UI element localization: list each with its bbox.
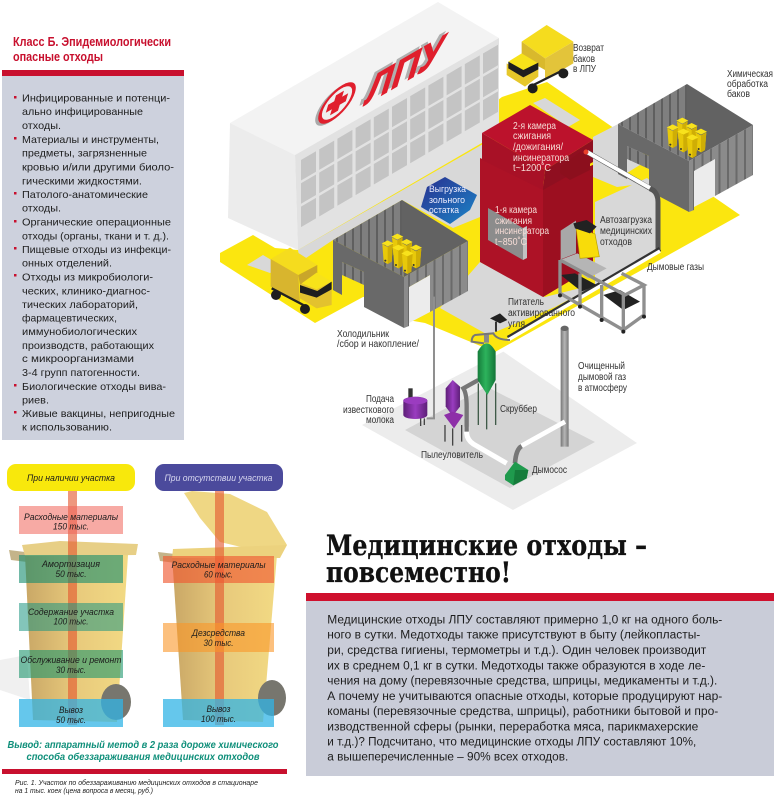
article (306, 529, 774, 776)
waste list text: производств, работающих (22, 340, 155, 352)
diagram labels: в ЛПУ (573, 64, 597, 75)
left option header (7, 464, 135, 491)
diagram labels: дымовой газ (578, 372, 626, 383)
ash discharge hexagon: Выгрузка (429, 184, 467, 195)
waste list text: ально инфицированные (22, 106, 143, 118)
flue gas pipe (584, 150, 658, 250)
duct from dust collector (467, 427, 507, 463)
waste list text: онных отделений. (22, 258, 112, 270)
diagram labels: Подача (366, 394, 394, 405)
hospital building (228, 2, 499, 250)
left cost blocks: Расходные материалы (24, 512, 118, 523)
chamber labels: сжигания (513, 131, 551, 142)
left cost blocks: Амортизация (41, 559, 100, 570)
ground: yellow roads (220, 82, 740, 352)
article text: изводственной сферы (рынки, переработка мяса, парикмахерские (327, 721, 698, 733)
bins cost comparison (0, 464, 287, 795)
left cost blocks: 150 тыс. (53, 522, 89, 532)
diagram labels: угля (508, 319, 525, 330)
diagram labels: баков (573, 53, 595, 65)
ash discharge hexagon: зольного (429, 195, 465, 206)
right cost blocks: 100 тыс. (201, 714, 236, 725)
exhaust fan (505, 462, 528, 485)
left cost blocks: 50 тыс. (56, 569, 86, 580)
hospital logo: ЛПУ (360, 23, 451, 115)
diagram labels: Дымовые газы (647, 262, 704, 273)
equipment pad (362, 352, 637, 510)
left bin illustration (0, 541, 138, 722)
right cost blocks: Расходные материалы (172, 560, 266, 571)
return truck (507, 25, 573, 93)
article text: А почему не учитываются опасные отходы, которые продуцируют нар- (327, 691, 722, 703)
chamber labels: инсинератора (513, 153, 569, 164)
cold storage shed (333, 200, 468, 328)
ash discharge hexagon (421, 177, 477, 224)
diagram labels: медицинских (600, 226, 652, 237)
chamber labels: t~1200˚С (513, 162, 551, 174)
right option header (155, 464, 283, 491)
article text: ри, средства гигиены, термометры и т.д.). Один человек производит (327, 645, 707, 657)
conclusion: Вывод: аппаратный метод в 2 раза дороже химического (8, 739, 279, 751)
article text: и т.д.)? Подсчитано, что медицинские отходы ЛПУ составляют 10%, (327, 737, 696, 749)
waste list text: тических лабораторий, (22, 299, 138, 311)
waste list text: Живые вакцины, непригодные (22, 408, 175, 420)
chamber labels: сжигания (495, 216, 532, 227)
left cost blocks: 30 тыс. (56, 665, 86, 676)
article text: их в среднем 0,1 кг в сутки. Медотходы также образуются в ходе ле- (327, 660, 705, 672)
vertical cost bars (68, 491, 224, 725)
chamber labels: 2-я камера (513, 121, 556, 132)
duct to stack (515, 422, 565, 463)
conclusion (8, 739, 279, 763)
waste list text: 3-4 групп патогенности. (22, 367, 140, 379)
exhaust stack (561, 326, 569, 447)
diagram labels: /сбор и накопление/ (337, 338, 419, 350)
figure caption: на 1 тыс. коек (цена вопроса в месяц, руб.) (15, 786, 153, 795)
waste list text: Органические операционные (22, 216, 171, 228)
diagram labels (337, 43, 773, 476)
chamber labels (495, 121, 569, 248)
diagram labels: молока (366, 415, 394, 426)
right cost blocks (163, 556, 274, 727)
chemical treatment shed (618, 84, 753, 212)
diagram labels: известкового (343, 405, 394, 416)
waste list text: отходы. (22, 202, 61, 214)
panel title: опасные отходы (13, 49, 103, 64)
right cost blocks: 60 тыс. (204, 570, 233, 580)
chamber labels: /дожигания/ (513, 142, 563, 153)
waste list text: с микроорганизмами (22, 353, 134, 365)
building windows (301, 45, 498, 227)
conveyor gas line (508, 249, 660, 340)
left cost blocks: Вывоз (59, 705, 84, 716)
left option header: При наличии участка (27, 473, 115, 484)
building front wall (295, 38, 499, 250)
left cost blocks: 50 тыс. (56, 715, 86, 726)
second chamber (482, 105, 593, 190)
article text: Медицинские отходы ЛПУ составляют примерно 1,0 кг на одного боль- (327, 614, 722, 626)
panel: class B waste list (2, 34, 184, 440)
article heading: Медицинские отходы – (326, 529, 647, 562)
left cost blocks: Обслуживание и ремонт (20, 655, 122, 666)
incinerator (480, 105, 593, 297)
article text: чения на дому (перевязочные средства, шприцы, медикаменты и т.д.). (327, 676, 717, 688)
figure caption: Рис. 1. Участок по обеззараживанию медицинских отходов в стационаре (15, 778, 258, 787)
right cost blocks: Вывоз (206, 704, 231, 715)
building end wall (228, 123, 298, 250)
loader with conveyor frame (558, 220, 646, 334)
waste list text: Отходы из микробиологи- (22, 272, 154, 284)
diagram labels: Скруббер (500, 403, 537, 415)
diagram labels: Пылеуловитель (421, 450, 483, 461)
left cost blocks (19, 506, 123, 727)
lime feed line (427, 297, 434, 418)
waste list text: к использованию. (22, 422, 112, 434)
article panel (306, 601, 774, 776)
waste list text (22, 92, 175, 434)
dust collector (444, 380, 463, 446)
chamber labels: инсинератора (495, 226, 549, 237)
panel title: Класс Б. Эпидемиологически (13, 34, 171, 49)
chamber labels: 1-я камера (495, 205, 537, 216)
building roof (230, 2, 499, 155)
waste list text: отходы. (22, 120, 61, 132)
waste list text: отходы (органы, ткани и т. д.). (22, 230, 169, 242)
diagram labels: отходов (600, 237, 632, 248)
waste list text: кровью и/или другими биоло- (22, 162, 175, 174)
ground: grey areas (247, 98, 657, 335)
left cost blocks: 100 тыс. (54, 616, 88, 628)
scrubber (478, 333, 496, 429)
red rule (2, 769, 287, 774)
red rule (2, 70, 184, 76)
diagram labels: Питатель (508, 297, 544, 308)
article text: команы (перевязочные средства, шприцы), работники бытовой и про- (327, 706, 718, 718)
right cost blocks: 30 тыс. (204, 638, 234, 649)
ash discharge hexagon: остатка (429, 205, 460, 216)
waste list text: предметы, загрязненные (22, 148, 147, 160)
waste list text: ческих, клинико-диагнос- (22, 286, 151, 298)
waste list text: риев. (22, 394, 49, 406)
right bin illustration (158, 491, 287, 722)
diagram labels: в атмосферу (578, 382, 627, 394)
diagram labels: Холодильник (337, 329, 390, 340)
article text (327, 614, 722, 764)
diagram labels: обработка (727, 78, 768, 90)
panel background (2, 76, 184, 440)
hospital logo: ЛПУ (357, 22, 448, 114)
right option header: При отсутствии участка (164, 473, 272, 484)
waste list bullets (14, 96, 16, 414)
article text: ного в сутки. Медотходы также присутствуют в быту (лейкопласты- (327, 629, 700, 641)
first chamber (480, 158, 593, 297)
diagram labels: Автозагрузка (600, 215, 652, 226)
waste list text: Патолого-анатомические (22, 189, 148, 201)
conclusion: способа обеззараживания медицинских отходов (26, 751, 260, 763)
chamber labels: t~850˚С (495, 236, 527, 248)
article heading: повсеместно! (326, 556, 511, 589)
diagram labels: Дымосос (532, 465, 567, 476)
hospital logo (311, 22, 451, 133)
red rule (306, 593, 774, 601)
waste list text: гическими жидкостями. (22, 176, 142, 188)
waste list text: Материалы и инструменты, (22, 134, 159, 146)
waste list text: иммунобиологических (22, 326, 138, 338)
diagram labels: баков (727, 88, 750, 100)
article text: а вышеперечисленные – 90% всех отходов. (327, 752, 568, 764)
diagram labels: активированного (508, 308, 575, 319)
diagram labels: Возврат (573, 43, 604, 54)
cold storage truck (271, 248, 332, 314)
gas cleaning equipment (362, 297, 637, 510)
duct upper section (463, 380, 478, 432)
left cost blocks: Содержание участка (28, 607, 114, 618)
diagram labels: Очищенный (578, 361, 625, 372)
figure caption (15, 778, 258, 795)
article heading (326, 529, 647, 589)
process diagram: incineration plant (220, 2, 773, 510)
waste list text: фармацевтических, (22, 312, 117, 324)
lime milk tank (403, 388, 427, 426)
waste list text: Биологические отходы вива- (22, 381, 167, 393)
panel title (13, 34, 171, 64)
waste list text: Пищевые отходы из инфекци- (22, 244, 171, 256)
waste list text: Инфицированные и потенци- (22, 92, 171, 104)
right cost blocks: Дезсредства (191, 628, 245, 639)
carbon feeder (472, 313, 510, 343)
